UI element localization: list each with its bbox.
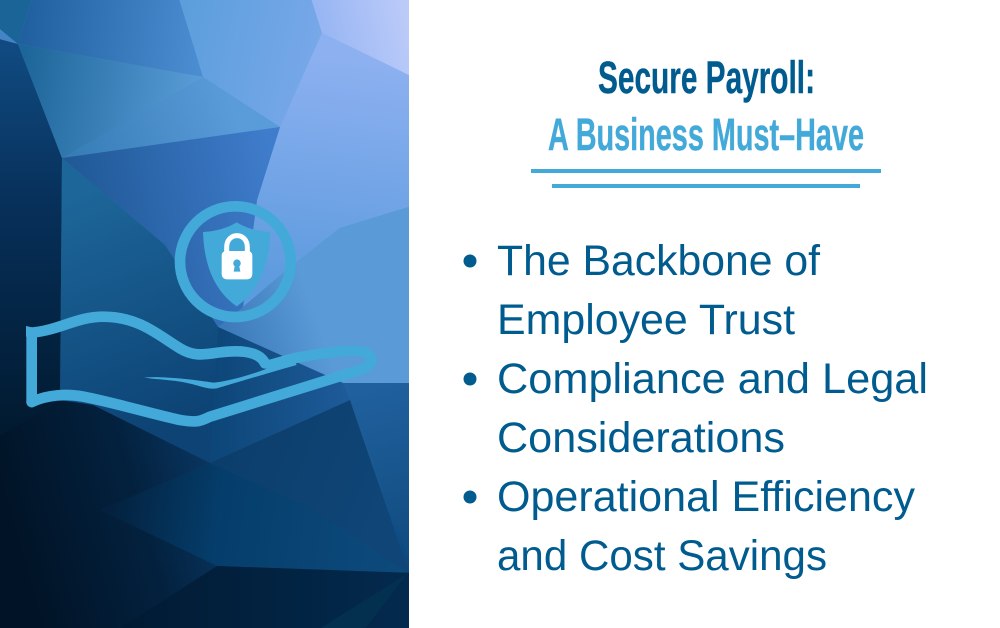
bullet 3: Operational Efficiency	[497, 473, 915, 521]
title underlines	[531, 169, 881, 188]
panel: left polygon background	[0, 0, 415, 628]
bullet 1: The Backbone of	[497, 237, 821, 285]
bullet 3: and Cost Savings	[497, 532, 827, 580]
icon: shield	[203, 222, 270, 306]
bullet 3	[464, 473, 915, 580]
icon: circle ring	[180, 206, 291, 317]
icon: open hand outline	[26, 317, 371, 421]
icon: padlock	[222, 236, 252, 279]
bullet 1: Employee Trust	[497, 296, 795, 344]
bullet 1	[464, 237, 821, 344]
heading: title	[548, 52, 864, 160]
bullet 2	[464, 355, 928, 462]
bullet 2: Considerations	[497, 414, 785, 462]
title line 1: Secure Payroll:	[598, 52, 815, 103]
text block: bullet list	[464, 237, 928, 580]
icon: hand with shield and padlock	[26, 206, 371, 421]
bullet 2: Compliance and Legal	[497, 355, 928, 403]
